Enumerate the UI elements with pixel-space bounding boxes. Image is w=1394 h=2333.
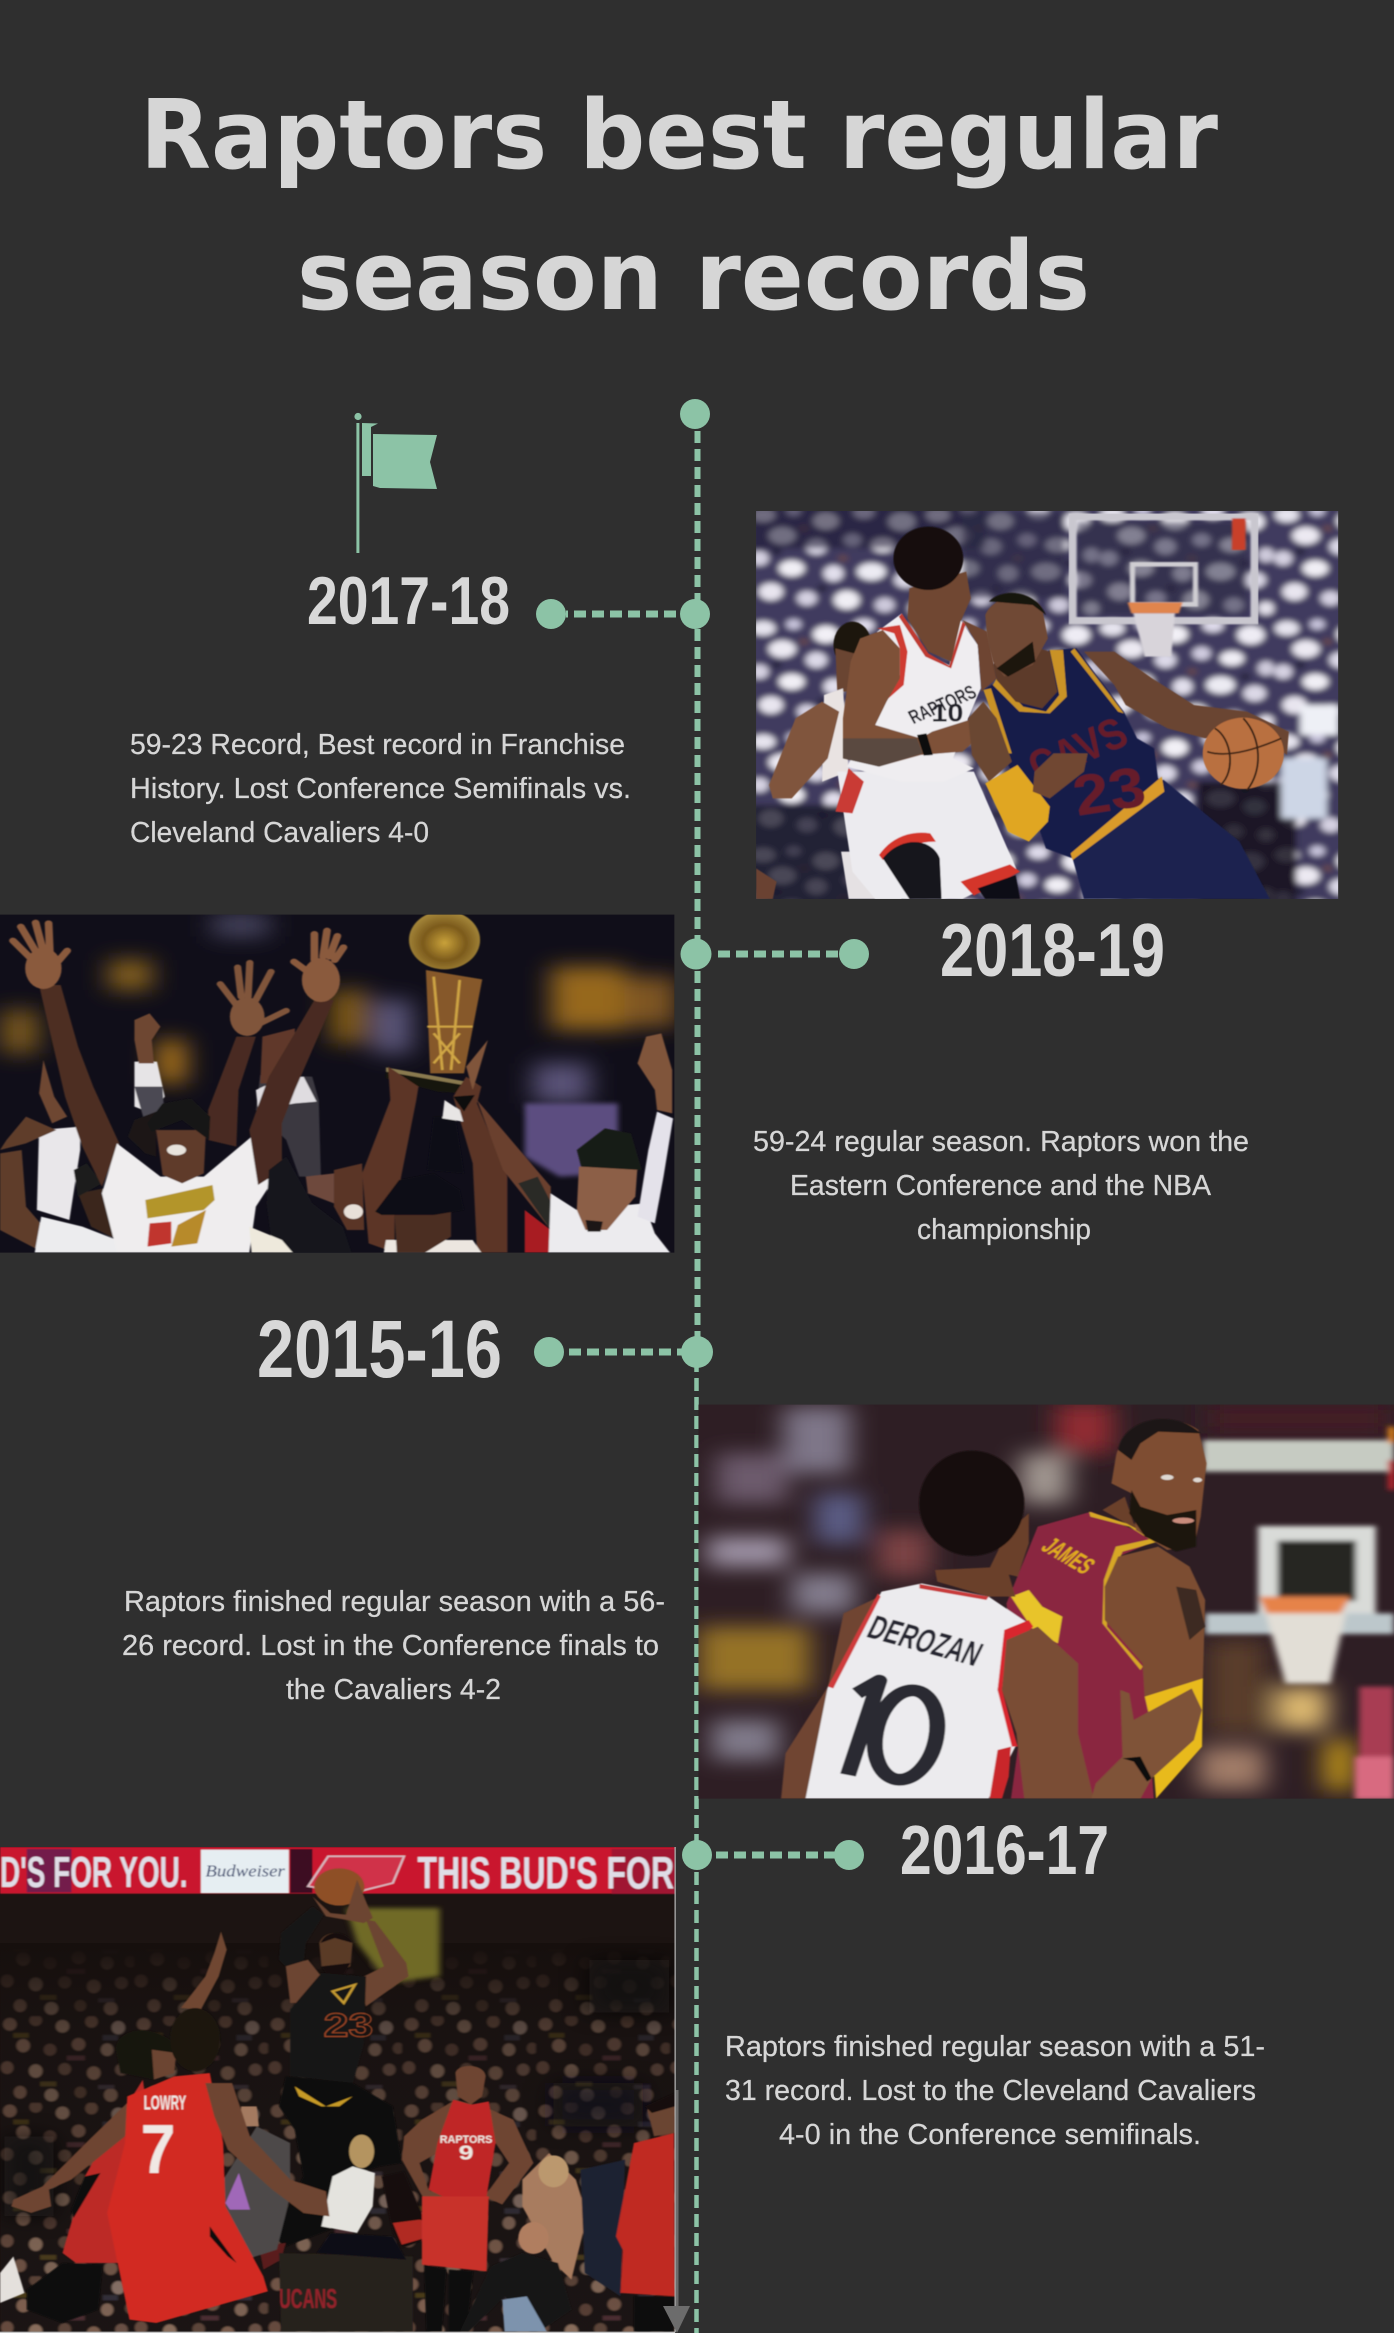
connector: 2015-16: [534, 1336, 713, 1368]
text: 2015-16 description: Raptors finished regular season with a 56-: [124, 1586, 665, 1618]
year: 2016-17: 2016-17: [900, 1811, 1109, 1889]
text: 2018-19 description: 59-24 regular season. Raptors won the: [753, 1126, 1249, 1158]
photo: DeRozan and LeBron on court: DEROZAN: [862, 1609, 988, 1673]
rear raptor player: [756, 622, 902, 899]
DeRozan: [835, 527, 1020, 899]
LeBron: [968, 593, 1289, 899]
players: LOWRY: [144, 2093, 186, 2115]
timeline spine: [680, 399, 710, 2333]
title: Raptors best regular: [140, 81, 1218, 191]
connector: 2017-18: [536, 599, 710, 629]
photo: DeRozan and LeBron on court: [698, 1404, 1394, 1799]
photo: championship celebration: [0, 914, 674, 1253]
title: season records: [297, 222, 1090, 332]
DeRozan: 10: [931, 698, 963, 727]
text: 2016-17 description: Raptors finished regular season with a 51-: [725, 2031, 1265, 2063]
arrow: timeline end: [663, 2090, 690, 2333]
text: 2018-19 description: championship: [917, 1214, 1091, 1246]
photo: DeRozan and LeBron on court: JAMES: [1036, 1532, 1101, 1579]
player in cap: [384, 1240, 481, 1253]
icon: flag: [354, 413, 437, 553]
banner: Budweiser: [205, 1862, 286, 1881]
text: 2018-19 description: Eastern Conference and the NBA: [790, 1170, 1212, 1202]
red teammate behind: [62, 2080, 152, 2263]
fans right: [522, 2153, 587, 2280]
banner: [0, 1847, 675, 1898]
LeBron: [1006, 1512, 1158, 1799]
bench player: [616, 2133, 675, 2296]
players: RAPTORS: [440, 2134, 492, 2146]
centre suit: [267, 1157, 351, 1253]
players: 9: [459, 2143, 474, 2165]
LeBron: 23: [1068, 754, 1151, 828]
title: [140, 81, 1218, 332]
text: 2018-19 description: [753, 1126, 1249, 1246]
Lowry: [11, 2096, 134, 2213]
back figures: [134, 1062, 165, 1113]
connector: 2016-17: [682, 1840, 864, 1870]
text: 2017-18 description: 59-23 Record, Best record in Franchise: [130, 729, 625, 761]
mid raised arm: [208, 1037, 256, 1147]
hand: [1091, 1688, 1202, 1799]
year: 2018-19: 2018-19: [940, 908, 1165, 992]
text: 2015-16 description: the Cavaliers 4-2: [286, 1674, 501, 1706]
players: 7: [141, 2110, 175, 2188]
defender arm: [181, 1931, 227, 2010]
photo: LeBron jump shot: [0, 1847, 676, 2333]
year: 2015-16: 2015-16: [257, 1304, 502, 1395]
banner: D'S FOR YOU.: [0, 1848, 188, 1897]
year: 2017-18: 2017-18: [307, 563, 510, 639]
right player: [549, 1193, 670, 1253]
jersey number 10: [848, 1681, 945, 1783]
photo: DeRozan guards LeBron: [756, 511, 1338, 899]
scorer table: [279, 2253, 413, 2332]
text: 2015-16 description: 26 record. Lost in the Conference finals to: [122, 1630, 659, 1662]
shirt: [102, 1137, 282, 1253]
right raised arm: [249, 1000, 334, 1185]
backboard: [1073, 517, 1255, 657]
connector: 2018-19: [680, 938, 869, 970]
DeRozan: RAPTORS: [905, 681, 980, 728]
text: 2017-18 description: History. Lost Conference Semifinals vs.: [130, 773, 631, 805]
players: [0, 1868, 675, 2332]
suit and woman: [219, 2126, 290, 2260]
left figures: [37, 1127, 80, 1220]
trophy: [409, 911, 480, 969]
text: 2015-16 description: [122, 1586, 665, 1706]
Ibaka: [402, 2100, 533, 2270]
text: 2016-17 description: 31 record. Lost to the Cleveland Cavaliers: [725, 2075, 1256, 2107]
players: UCANS: [279, 2283, 337, 2315]
text: 2016-17 description: 4-0 in the Conference semifinals.: [779, 2119, 1201, 2151]
holders: [362, 1067, 418, 1253]
text: 2016-17 description: [725, 2031, 1265, 2151]
champion logo: [145, 1185, 215, 1218]
LeBron: [279, 1906, 324, 1966]
DeRozan: [781, 1597, 879, 1799]
LeBron: CAVS: [1019, 708, 1136, 791]
players: 23: [324, 2007, 373, 2044]
text: 2017-18 description: Cleveland Cavaliers 4-0: [130, 817, 429, 849]
face and cap: [156, 1130, 206, 1183]
left raised arm: [39, 985, 119, 1187]
text: 2017-18 description: [130, 729, 631, 849]
